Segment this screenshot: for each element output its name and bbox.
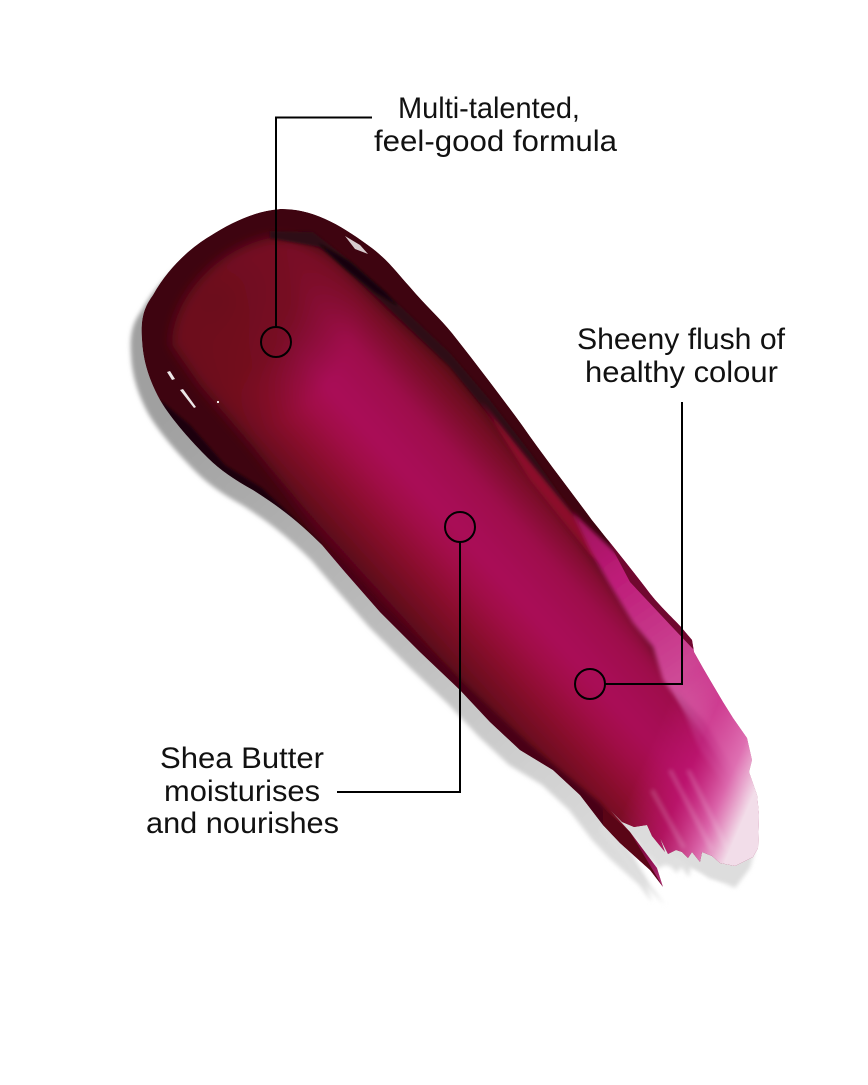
- label text: healthy colour: [585, 356, 778, 389]
- leader line and marker: [261, 118, 372, 357]
- label text: Sheeny flush of: [577, 323, 786, 356]
- label text: feel-good formula: [374, 125, 617, 158]
- pink streak: [572, 512, 759, 838]
- tail sliver: [603, 808, 663, 887]
- body gradient: [172, 238, 790, 900]
- callout: Shea Butter moisturises and nourishes: [146, 512, 475, 840]
- callout: Sheeny flush of healthy colour: [575, 323, 786, 699]
- label text: Shea Butter: [160, 742, 324, 775]
- lipstick swatch: [142, 209, 790, 900]
- red seam: [482, 403, 596, 560]
- label text: [577, 323, 786, 389]
- left glossy dark edge: [160, 400, 322, 545]
- gloss highlights: [167, 236, 368, 408]
- swatch body colour: [172, 238, 790, 900]
- highlight left lower: [180, 389, 196, 408]
- small speck: [217, 401, 219, 403]
- callout: Multi-talented, feel-good formula: [261, 92, 617, 357]
- dark rim base: [142, 209, 759, 887]
- pink fade at tip: [624, 662, 759, 887]
- glossy band dark streak: [318, 243, 398, 306]
- highlight top: [345, 236, 368, 254]
- label text: Multi-talented,: [398, 92, 580, 125]
- brush streak lines at tip: [652, 770, 728, 850]
- thin maroon edge by the streak: [607, 538, 694, 650]
- streak grey-pink stripe: [680, 698, 724, 764]
- label text: [374, 92, 617, 158]
- label text: and nourishes: [146, 807, 339, 840]
- leader line and marker: [337, 512, 475, 792]
- leader line and marker: [575, 402, 682, 699]
- swatch tail shadow: [600, 815, 755, 905]
- upper right glossy dark band: [270, 231, 578, 520]
- label text: [146, 742, 339, 840]
- highlight left upper: [167, 371, 175, 380]
- lower dark edge band: [322, 545, 660, 885]
- label text: moisturises: [164, 775, 320, 808]
- infographic: [128, 96, 786, 898]
- swatch drop shadow: [131, 224, 748, 902]
- warm head tint: [172, 232, 340, 411]
